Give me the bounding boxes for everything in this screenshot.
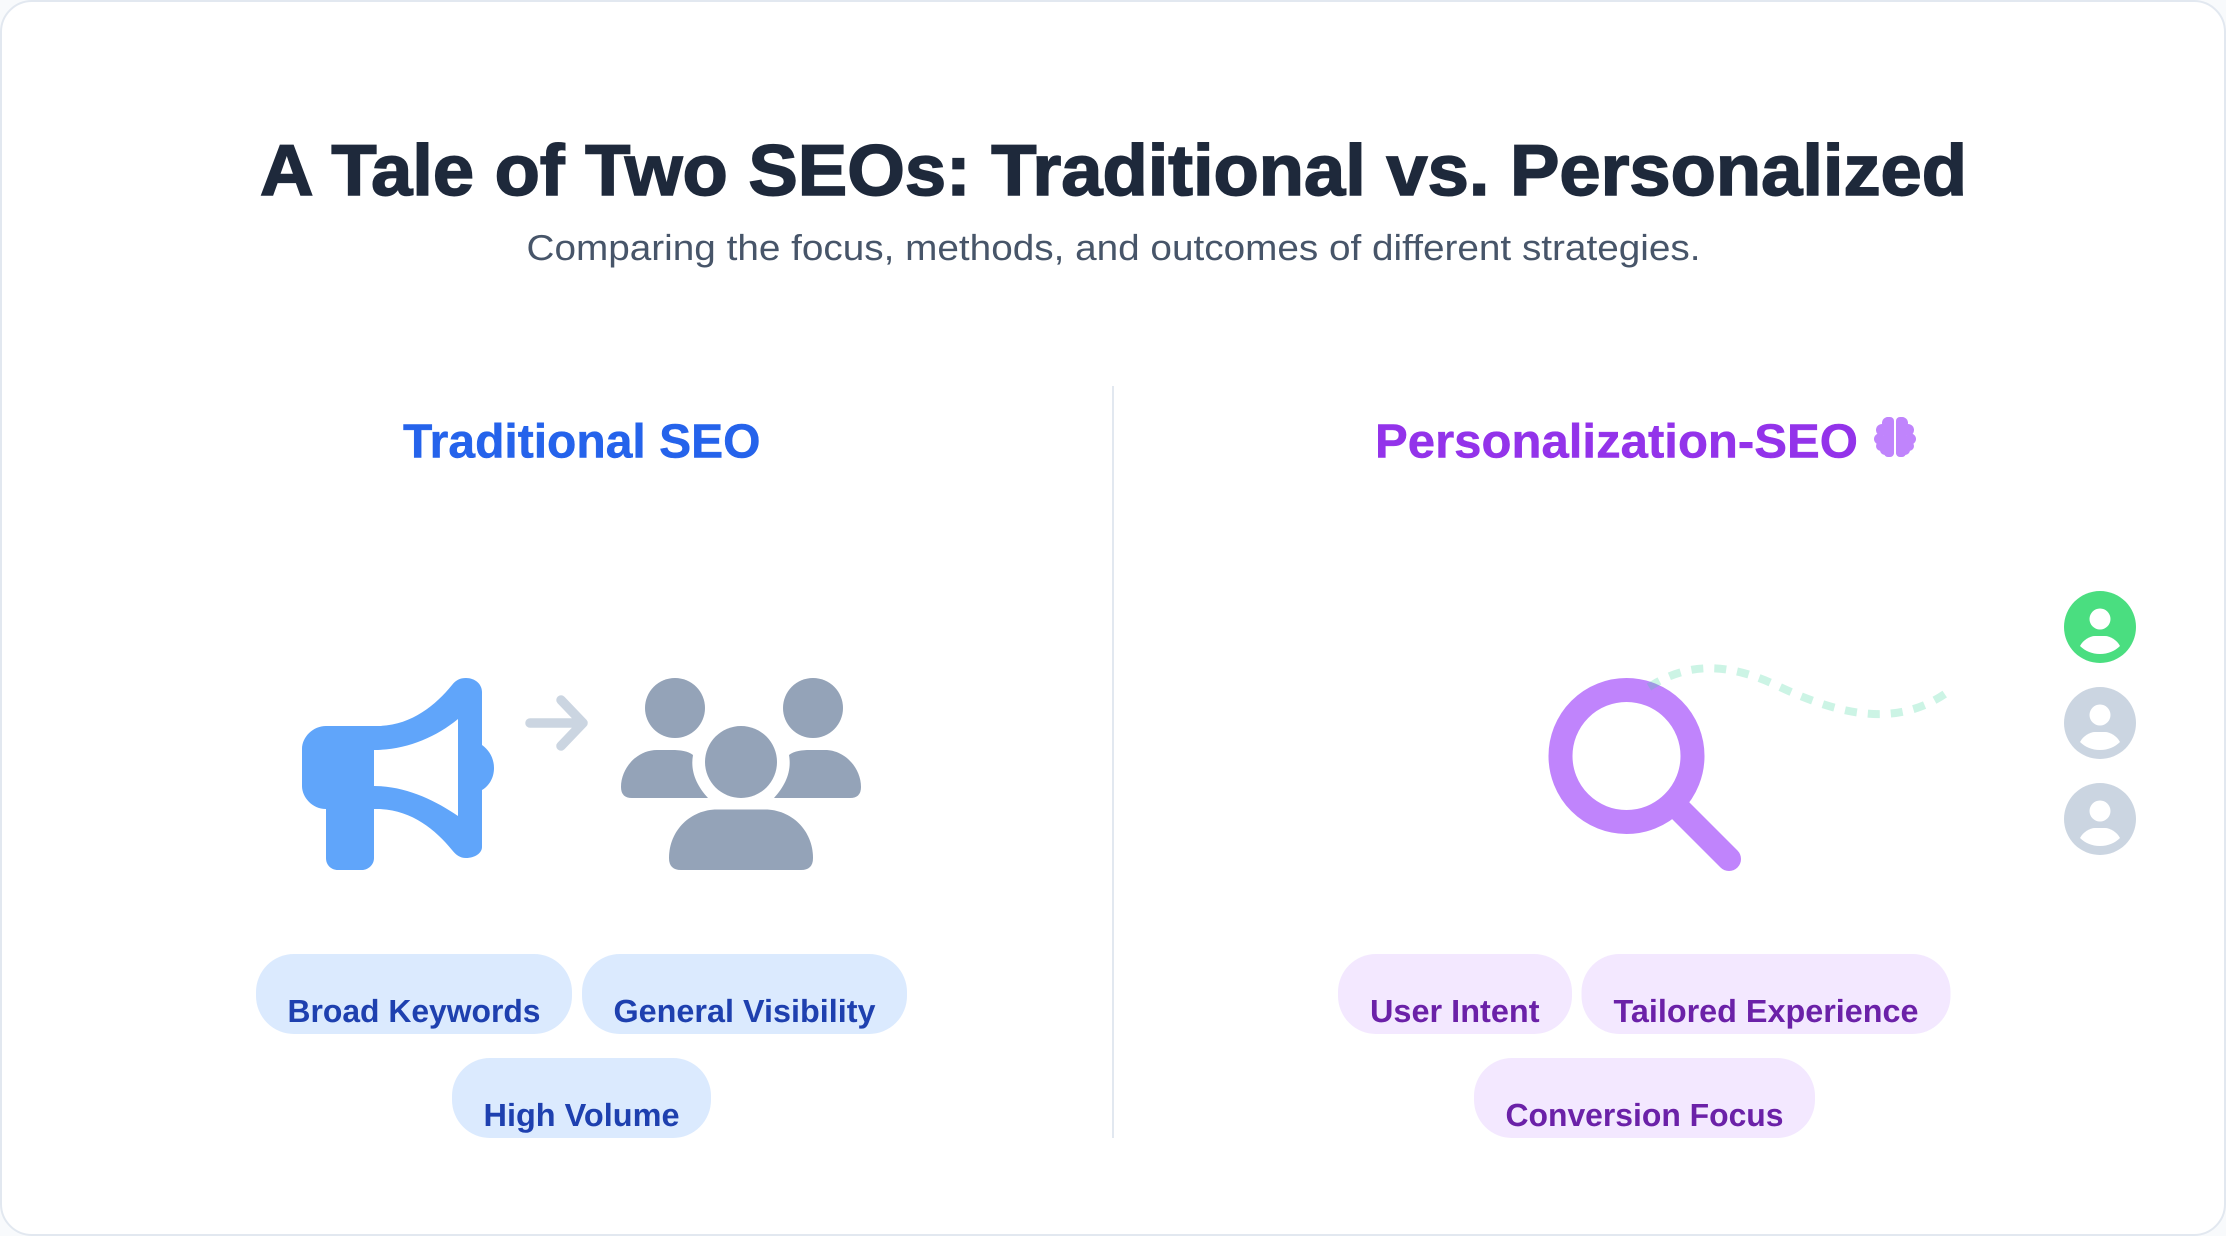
tag: conversion focus <box>1474 1058 1815 1138</box>
tag: conversion focus: Conversion Focus <box>1506 1097 1784 1133</box>
icon: group of people <box>621 678 861 870</box>
icon: magnifying glass <box>1560 690 1729 859</box>
tag: tailored experience <box>1582 954 1950 1034</box>
tag: tailored experience: Tailored Experience <box>1614 993 1918 1029</box>
heading: personalization SEO: Personalization-SEO <box>1375 416 1858 468</box>
icon: arrow <box>530 700 583 746</box>
icon: user avatar <box>2064 687 2136 759</box>
tag: broad keywords: Broad Keywords <box>288 993 540 1029</box>
dotted path to user <box>1649 668 1953 714</box>
icon: selected user avatar <box>2064 591 2136 663</box>
icon: user avatar <box>2064 783 2136 855</box>
tag: user intent <box>1338 954 1572 1034</box>
title: A Tale of Two SEOs: Traditional vs. Personalized <box>260 131 1967 211</box>
heading: traditional SEO: Traditional SEO <box>403 416 760 468</box>
tag: general visibility <box>582 954 907 1034</box>
tag: general visibility: General Visibility <box>614 993 876 1029</box>
subtitle: Comparing the focus, methods, and outcomes of different strategies. <box>526 227 1700 268</box>
panel: personalization SEO <box>1338 416 2136 1138</box>
tag: high volume <box>452 1058 711 1138</box>
icon: megaphone <box>302 678 494 870</box>
icon: brain <box>1874 417 1916 457</box>
tag: user intent: User Intent <box>1370 993 1540 1029</box>
tag: high volume: High Volume <box>484 1097 680 1133</box>
tag: broad keywords <box>256 954 572 1034</box>
panel: traditional SEO <box>256 416 907 1138</box>
